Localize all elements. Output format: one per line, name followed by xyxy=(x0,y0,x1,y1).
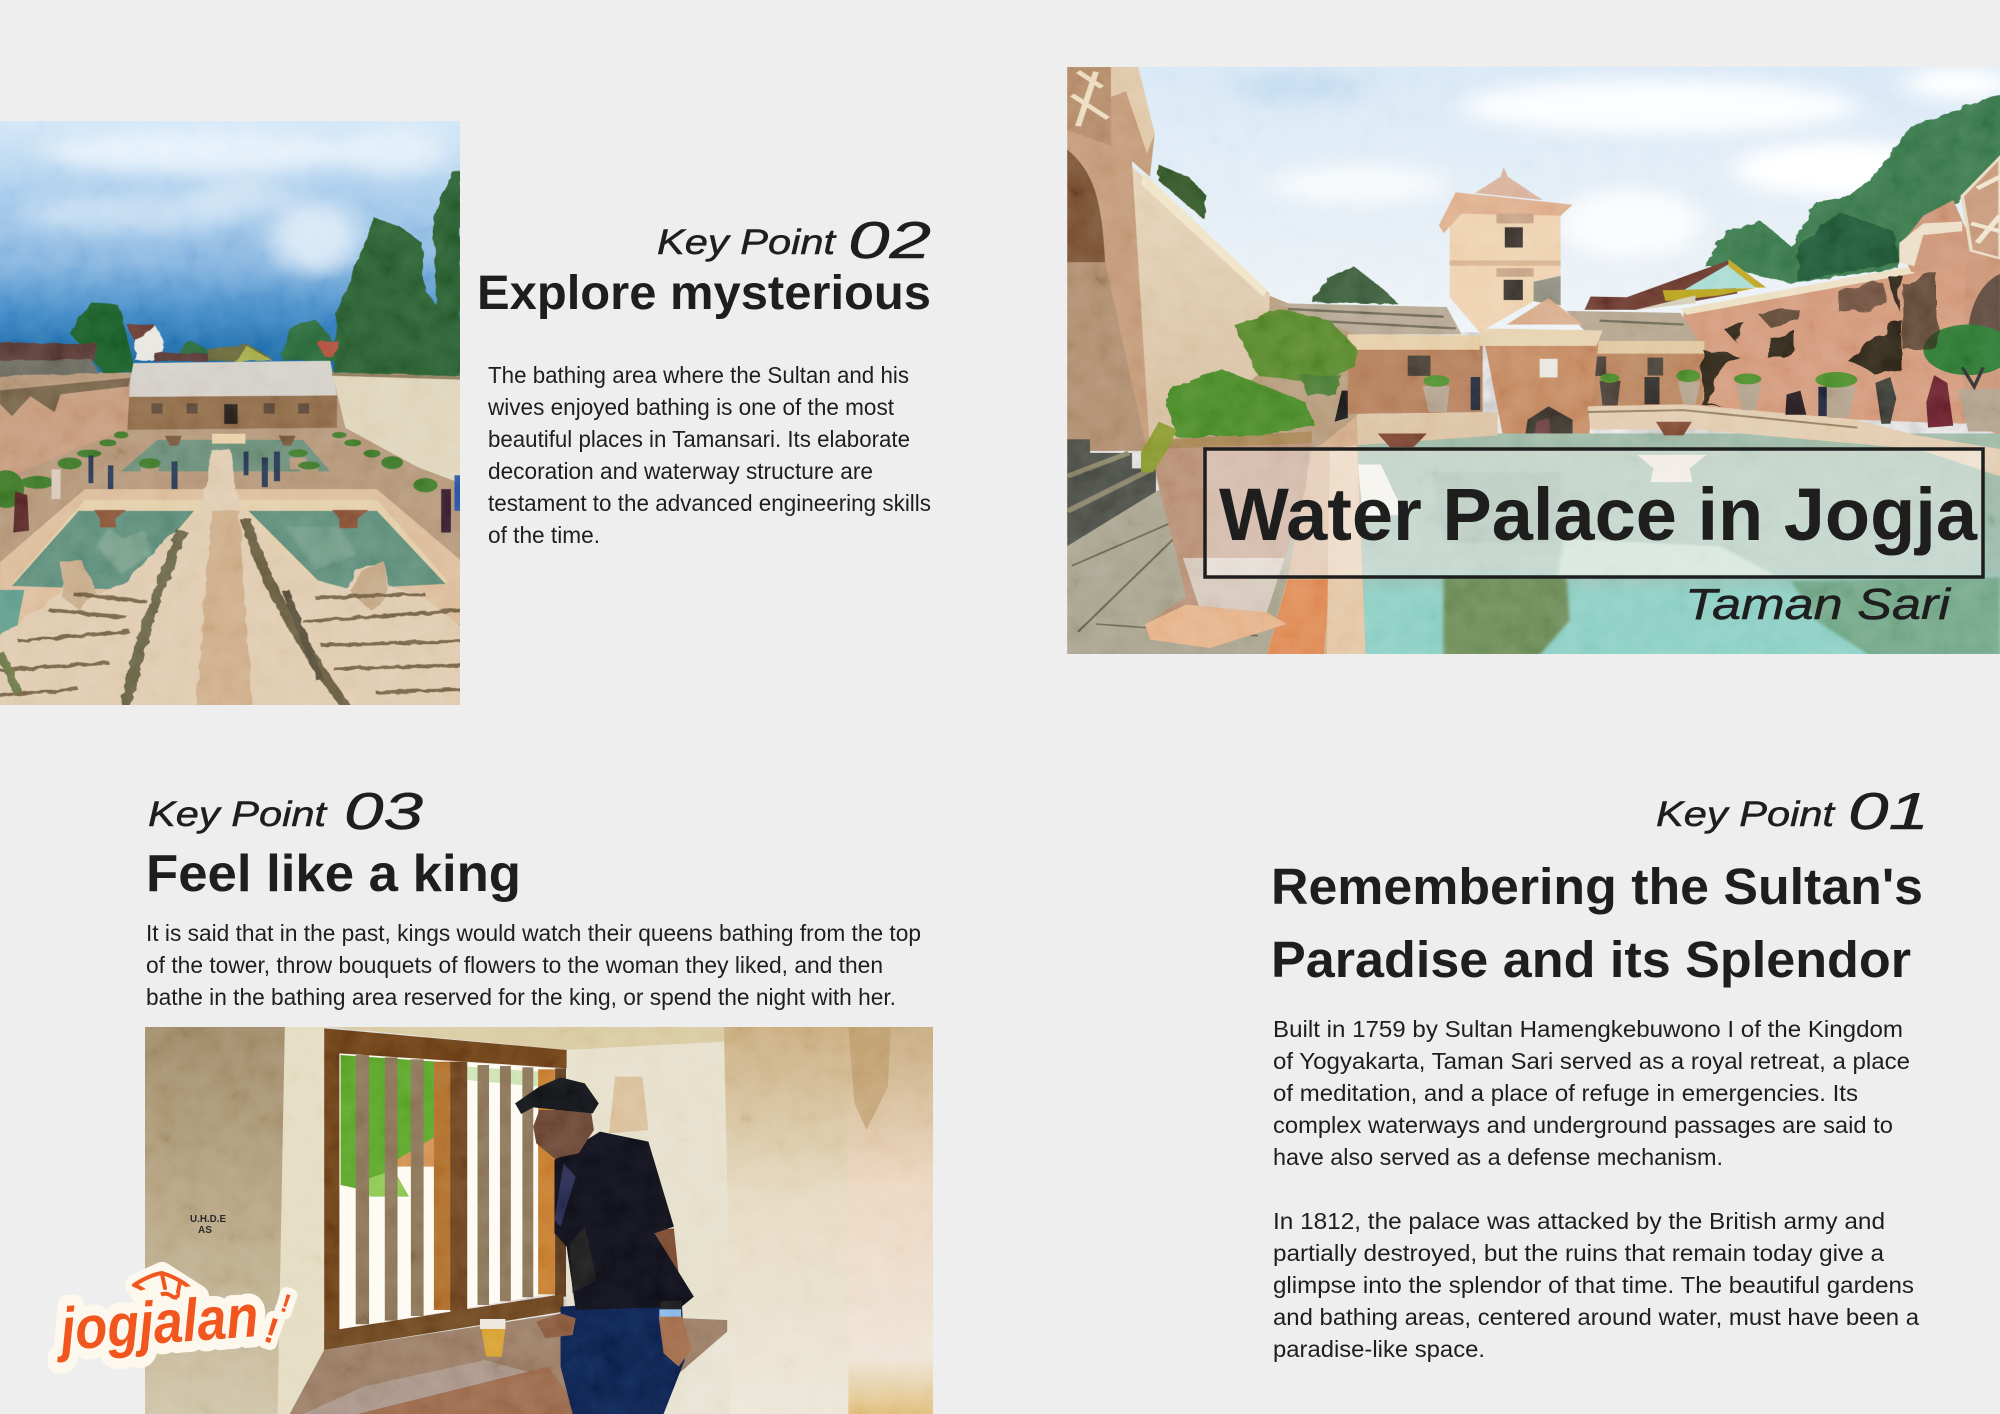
corner wall xyxy=(848,1027,933,1414)
back building: roofs xyxy=(1276,303,1704,354)
logo wordmark: jogjalan xyxy=(52,1282,260,1363)
label: key point 03: Key Point xyxy=(148,795,328,834)
body text: history paragraph two: partially destroyed, but the ruins that remain today give a xyxy=(1273,1240,1884,1266)
photo texture xyxy=(145,1027,933,1414)
body text: bathing area xyxy=(487,362,931,548)
label: key point 02 xyxy=(657,212,931,270)
lower pool frame xyxy=(0,489,460,626)
potted bushes along the back xyxy=(1423,325,2000,431)
photo texture xyxy=(1067,67,2000,654)
body text: history paragraph one: of Yogyakarta, Taman Sari served as a royal retreat, a place xyxy=(1273,1048,1910,1074)
body text: history paragraph two: glimpse into the splendor of that time. The beautiful gardens xyxy=(1273,1272,1914,1298)
logo umbrella sticker backing xyxy=(136,1273,198,1322)
centre mullion xyxy=(434,1062,451,1310)
trees on the right xyxy=(1159,87,2000,304)
subtitle: Taman Sari: Taman Sari xyxy=(1685,580,1951,629)
body text: history paragraph one: Built in 1759 by Sultan Hamengkebuwono I of the Kingdom xyxy=(1273,1016,1903,1042)
sky xyxy=(0,121,461,374)
body text: bathing area: decoration and waterway structure are xyxy=(488,458,873,484)
view outside xyxy=(339,1053,554,1330)
label: key point 01: 01 xyxy=(1848,783,1929,841)
label: key point 03 xyxy=(148,783,423,841)
label: key point 01: Key Point xyxy=(1656,795,1836,834)
photo: man at the tower window: AS xyxy=(198,1225,212,1236)
body text: bathing area: The bathing area where the Sultan and his xyxy=(488,362,909,388)
background trees and houses xyxy=(0,171,461,376)
right gate pillar xyxy=(1899,157,2000,441)
visitors xyxy=(1335,375,1953,428)
left wall xyxy=(0,376,130,481)
potted plants and visitors xyxy=(0,431,461,533)
water reflections xyxy=(1432,472,2000,655)
title box xyxy=(1205,449,1983,577)
body text: kings and queens: of the tower, throw bouquets of flowers to the woman they liked, and then xyxy=(146,952,883,978)
heading: remembering the sultan's paradise: Paradise and its Splendor xyxy=(1271,931,1911,988)
steps xyxy=(1067,439,1156,546)
translucent title panel xyxy=(1205,449,1983,577)
wall graffiti: U.H.D.E xyxy=(190,1214,226,1225)
garden greenery xyxy=(341,1055,436,1198)
courtyard floor xyxy=(92,430,128,443)
heading: remembering the sultan's paradise xyxy=(1271,858,1923,988)
foreground roof ridge xyxy=(0,448,460,705)
window ledge xyxy=(290,1313,727,1414)
body text: bathing area: testament to the advanced engineering skills xyxy=(488,490,931,516)
body text: history paragraph one: of meditation, and a place of refuge in emergencies. Its xyxy=(1273,1080,1858,1106)
lower ground base xyxy=(0,372,460,626)
photo: Taman Sari main pool xyxy=(1060,60,2000,657)
inner wall reveal xyxy=(278,1027,327,1414)
body text: kings and queens xyxy=(146,920,921,1010)
body text: bathing area: beautiful places in Tamansari. Its elaborate xyxy=(488,426,910,452)
label: key point 03: 03 xyxy=(344,783,423,841)
photo: bathing pools seen from the roof xyxy=(0,121,485,732)
body text: history paragraph one xyxy=(1273,1016,1910,1170)
tower xyxy=(1439,167,1573,332)
large foreground planter xyxy=(1145,431,1312,648)
water xyxy=(1357,433,2000,657)
panel: key point 01 xyxy=(1271,783,1929,1362)
body text: bathing area: of the time. xyxy=(488,522,600,548)
upper pool xyxy=(121,440,330,471)
back building: barred windows xyxy=(1408,356,1663,376)
photo: man at the tower window xyxy=(145,1027,933,1414)
logo exclamation marks xyxy=(260,1288,295,1352)
planter foliage xyxy=(1165,369,1315,437)
tree behind planter xyxy=(1234,309,1357,395)
fountain urns xyxy=(1378,422,1706,482)
left wall xyxy=(145,1027,287,1414)
label: key point 01 xyxy=(1656,783,1929,841)
pool urns xyxy=(94,510,126,527)
logo umbrella mark xyxy=(134,1273,196,1322)
sill wood xyxy=(324,1294,564,1350)
heading: remembering the sultan's paradise: Remembering the Sultan's xyxy=(1271,858,1923,915)
man xyxy=(515,1077,694,1414)
back building: wall xyxy=(1348,336,1483,414)
left wall xyxy=(1126,161,1270,451)
body text: history paragraph one: have also served as a defense mechanism. xyxy=(1273,1144,1723,1170)
photo texture xyxy=(0,121,460,705)
body text: bathing area: wives enjoyed bathing is one of the most xyxy=(487,394,895,420)
pool edge xyxy=(1267,416,1405,655)
right wall xyxy=(332,373,461,483)
left gate pillar xyxy=(1067,67,1155,451)
pavilion roof xyxy=(127,361,337,397)
right side wall xyxy=(724,1027,851,1414)
house behind wall xyxy=(1585,259,1766,310)
soffit xyxy=(324,1027,730,1050)
wooden bars xyxy=(356,1055,533,1324)
panel: key point 02 xyxy=(477,212,931,548)
wall stains xyxy=(1702,273,1937,407)
plaster under the ledge xyxy=(658,1318,730,1414)
label: key point 02: 02 xyxy=(848,212,931,270)
body text: kings and queens: bathe in the bathing area reserved for the king, or spend the night with her. xyxy=(146,984,896,1010)
back ledges xyxy=(1357,404,2000,476)
pavilion wall xyxy=(127,395,337,430)
clouds xyxy=(1228,68,2000,258)
label: key point 02: Key Point xyxy=(657,223,837,262)
main title: Water Palace in Jogja xyxy=(1219,473,1978,556)
right pool water xyxy=(248,511,445,590)
sky xyxy=(1060,60,2000,332)
window reveal wall xyxy=(567,1042,730,1322)
right wall xyxy=(1683,255,1965,424)
coffee cup xyxy=(480,1319,505,1357)
body text: kings and queens: It is said that in the past, kings would watch their queens bathing from the top xyxy=(146,920,921,946)
wall coping xyxy=(1680,266,1914,315)
body text: history paragraph two: paradise-like space. xyxy=(1273,1336,1485,1362)
shaded gap behind planter xyxy=(1150,293,1360,453)
heading: explore mysterious: Explore mysterious xyxy=(477,267,931,320)
panel: key point 03 xyxy=(146,783,921,1010)
heading: feel like a king: Feel like a king xyxy=(146,845,521,903)
centre portico xyxy=(1480,298,1603,439)
seated visitor xyxy=(1141,422,1177,472)
body text: history paragraph two xyxy=(1273,1208,1919,1362)
body text: history paragraph two: In 1812, the palace was attacked by the British army and xyxy=(1273,1208,1885,1234)
right post xyxy=(538,1069,555,1294)
logo: jogjalan xyxy=(52,1273,295,1363)
logo exclamation marks: ! xyxy=(277,1288,295,1319)
wood frame top xyxy=(324,1028,567,1350)
clouds xyxy=(18,128,448,274)
logo exclamation marks: ! xyxy=(260,1309,284,1352)
left pool water xyxy=(12,511,194,590)
stone floor xyxy=(1067,443,1324,655)
body text: history paragraph two: and bathing areas, centered around water, must have been a xyxy=(1273,1304,1919,1330)
body text: history paragraph one: complex waterways and underground passages are said to xyxy=(1273,1112,1893,1138)
roof tile shadows xyxy=(0,518,460,705)
